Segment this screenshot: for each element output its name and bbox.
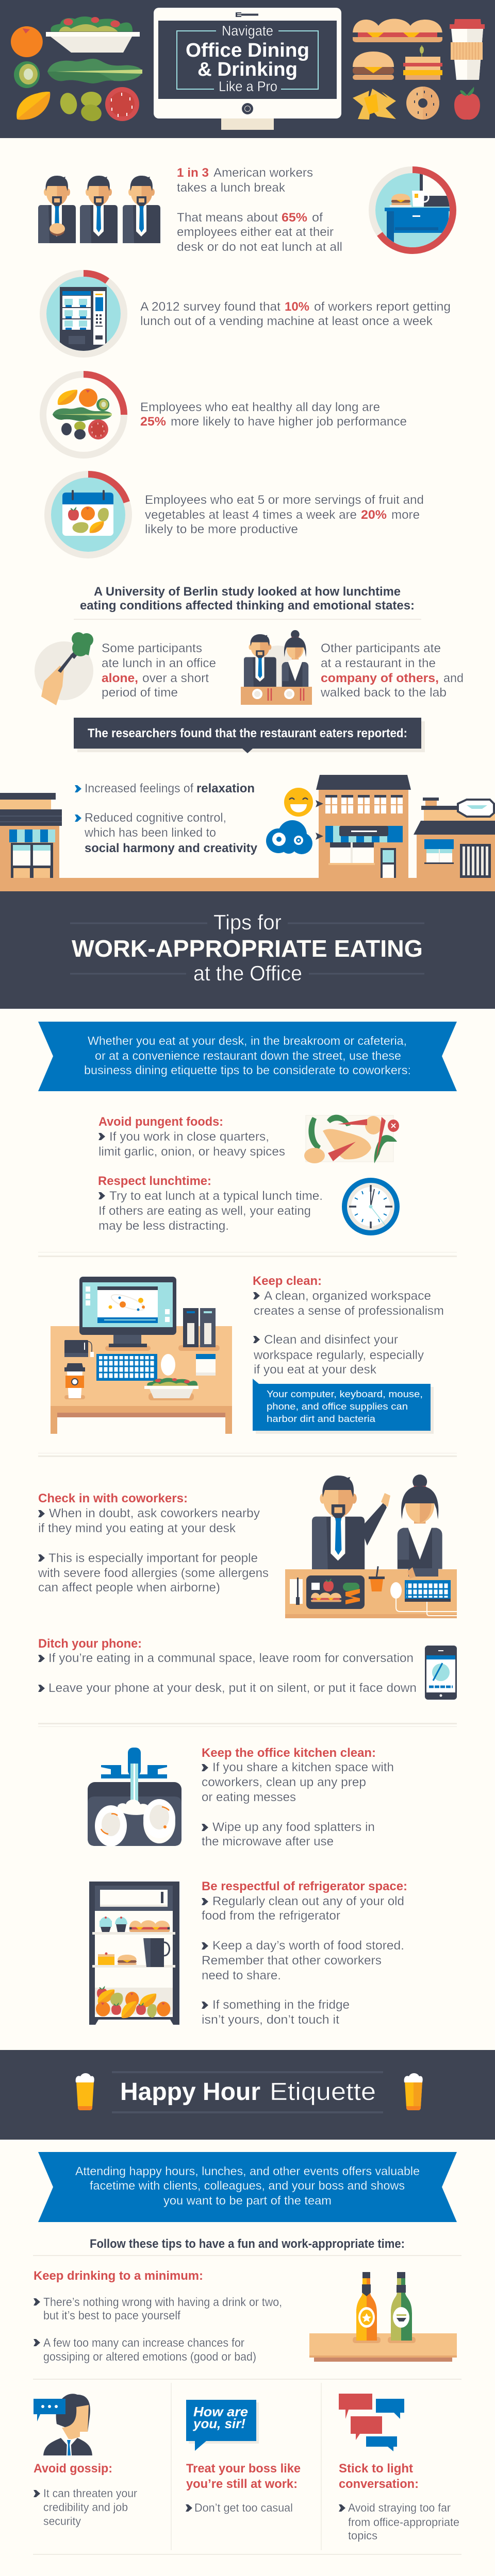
stat: 25 percent job performance — [43, 374, 407, 455]
icon: beer right — [404, 2073, 423, 2110]
icon: chat bubbles — [339, 2394, 404, 2451]
text block: American workers — [213, 166, 313, 180]
bullet: cognitive control: which has been linked to — [84, 826, 216, 840]
tip: keep drinking to a minimum: but it’s best to pace yourself — [43, 2309, 181, 2322]
chart: 25 percent ring with healthy plate — [43, 374, 124, 455]
text block: period of time — [102, 686, 178, 700]
napkin and fork — [290, 1578, 303, 1605]
tip: respect refrigerator space: isn’t yours, don’t touch it — [202, 2013, 339, 2027]
illustration: tidy desk — [51, 1277, 232, 1434]
tip: avoid gossip: Avoid gossip: — [34, 2462, 112, 2476]
tip: keep kitchen clean: Keep the office kitchen clean: — [202, 1746, 376, 1760]
text block — [140, 300, 451, 328]
chart: 10 percent ring with vending machine — [43, 273, 126, 355]
tip: check in with coworkers — [38, 1492, 269, 1595]
text block: A 2012 survey found that — [140, 300, 280, 314]
tip: keep clean: workspace regularly, especially — [253, 1348, 424, 1362]
banner: dining etiquette intro: business dining etiquette tips to be considerate to coworkers: — [84, 1063, 411, 1077]
text block — [140, 400, 407, 429]
tip: respect refrigerator space: Regularly clean out any of your old — [212, 1894, 404, 1908]
callout: researchers found — [74, 718, 425, 753]
text block: alone, — [102, 671, 138, 685]
banner: happy hour intro: you want to be part of the team — [163, 2194, 332, 2207]
notepad — [196, 1354, 216, 1376]
tip: stick to light conversation: conversation: — [339, 2477, 419, 2491]
icon: how are you speech bubble: How are — [193, 2404, 248, 2419]
icon: clock — [344, 1180, 397, 1233]
street ground — [0, 878, 495, 891]
tip: stick to light conversation — [339, 2394, 459, 2542]
tip: treat your boss: Treat your boss like — [186, 2462, 301, 2476]
tip: check in with coworkers: if they mind you eating at your desk — [38, 1521, 236, 1535]
tip: avoid gossip: It can threaten your — [43, 2487, 137, 2500]
text block: likely to be more productive — [145, 522, 298, 536]
tip: respect lunchtime — [98, 1174, 397, 1233]
tip: respect lunchtime: If others are eating as well, your eating — [98, 1204, 311, 1218]
text block: ate lunch in an office — [102, 656, 216, 670]
bullet: relaxation: relaxation — [196, 782, 255, 795]
section header: happy hour etiquette — [0, 2050, 495, 2140]
tip: stick to light conversation: Stick to light — [339, 2462, 413, 2476]
title: Navigate — [222, 23, 273, 39]
text block: and — [443, 671, 464, 685]
tip: check in with coworkers: with severe food allergies (some allergens — [38, 1566, 269, 1580]
tip: respect refrigerator space: need to share. — [202, 1969, 281, 1982]
section header: tips for work-appropriate eating: Tips for — [213, 910, 282, 934]
icon: bottles on bar — [309, 2272, 457, 2362]
speakers — [178, 1308, 220, 1351]
callout: computer bacteria: phone, and office supplies can — [267, 1401, 408, 1412]
icon: how are you speech bubble: you, sir! — [192, 2416, 245, 2431]
icon: desktop monitor — [154, 8, 341, 130]
text block — [145, 493, 424, 536]
illustration: restaurant street — [0, 775, 495, 891]
icon: hand with fork and broccoli — [35, 632, 93, 705]
title: Office Dining — [186, 40, 309, 61]
text block — [177, 166, 342, 254]
icon: right building — [414, 798, 495, 878]
tip: keep kitchen clean: or eating messes — [202, 1790, 296, 1804]
icon: man with speech bubble — [34, 2394, 92, 2455]
text block — [320, 641, 464, 700]
lunch tray — [306, 1575, 365, 1609]
chart: 65 percent ring with desk — [371, 170, 454, 252]
text block: of workers report getting — [314, 300, 451, 314]
icon: how are you speech bubble — [186, 2400, 259, 2451]
tip: keep clean: if you eat at your desk — [254, 1363, 377, 1377]
tip: keep clean: Keep clean: — [253, 1274, 322, 1288]
heading: University of Berlin study — [80, 585, 415, 613]
stat: 10 percent vending machine — [43, 273, 451, 355]
panel: eating alone — [35, 632, 216, 705]
callout: computer bacteria: Your computer, keyboard, mouse, — [267, 1388, 423, 1399]
tip: avoid pungent foods: If you work in close quarters, — [109, 1130, 269, 1144]
tip: respect refrigerator space: If something in the fridge — [212, 1998, 350, 2012]
tip: keep kitchen clean: coworkers, clean up any prep — [202, 1775, 366, 1789]
text block: That means about — [177, 211, 278, 225]
tip: check in with coworkers: Check in with coworkers: — [38, 1492, 188, 1505]
keyboard — [96, 1354, 157, 1381]
tip: avoid pungent foods: Avoid pungent foods: — [98, 1115, 223, 1129]
text block: lunch out of a vending machine at least once a week — [140, 314, 433, 328]
text block: more — [391, 508, 420, 522]
text block — [102, 641, 216, 700]
tip: respect lunchtime: Respect lunchtime: — [98, 1174, 211, 1188]
salad bowl — [144, 1378, 199, 1400]
icon: smiling face — [284, 788, 323, 817]
mouse — [161, 1354, 175, 1376]
text block: 1 in 3 — [177, 166, 209, 180]
banner: happy hour intro — [38, 2152, 457, 2222]
icon: refrigerator — [89, 1882, 179, 2025]
tip: treat your boss — [186, 2400, 301, 2514]
tip: keep drinking to a minimum: There’s nothing wrong with having a drink or two, — [43, 2295, 282, 2309]
text block: Employees who eat 5 or more servings of fruit and — [145, 493, 424, 507]
callout: computer bacteria: harbor dirt and bacteria — [267, 1413, 376, 1424]
icon: left building — [0, 793, 62, 882]
tip: avoid gossip: security — [43, 2515, 81, 2528]
banner: happy hour intro: Attending happy hours, lunches, and other events offers valuable — [75, 2164, 420, 2178]
text block: Some participants — [102, 641, 202, 655]
tip: avoid gossip — [34, 2394, 137, 2528]
icon: three workers — [38, 176, 160, 243]
banner: dining etiquette intro: Whether you eat at your desk, in the breakroom or cafeteria, — [88, 1034, 407, 1047]
section header: happy hour etiquette: Happy Hour — [120, 2078, 260, 2106]
icon: brain gears — [266, 820, 323, 854]
stat: 20 percent productivity — [47, 474, 424, 555]
tip: check in with coworkers: When in doubt, ask coworkers nearby — [49, 1506, 260, 1520]
bullet: relaxation: Increased feelings of — [85, 782, 193, 795]
bullet: cognitive control: Reduced cognitive control, — [85, 811, 226, 825]
tip: stick to light conversation: Avoid straying too far — [348, 2501, 451, 2514]
stat: 1 in 3 lunch break — [38, 166, 454, 254]
title: Like a Pro — [219, 78, 277, 94]
tip: respect refrigerator space: Keep a day’s worth of food stored. — [212, 1939, 404, 1953]
tip: keep clean: A clean, organized workspace — [264, 1289, 431, 1303]
banner: happy hour intro: facetime with clients, colleagues, and your boss and shows — [90, 2179, 405, 2192]
banner: dining etiquette intro — [38, 1022, 457, 1091]
hard drive — [64, 1340, 94, 1357]
tip: treat your boss: you’re still at work: — [186, 2477, 298, 2491]
icon: phone with no symbol — [425, 1646, 457, 1700]
heading: University of Berlin study: eating conditions affected thinking and emotional states: — [80, 599, 415, 613]
text block: 25% — [140, 415, 166, 429]
tip: stick to light conversation: from office-appropriate — [348, 2516, 459, 2529]
bullet: cognitive control: social harmony and creativity — [85, 841, 258, 855]
text block: Employees who eat healthy all day long are — [140, 400, 380, 414]
icon: two coworkers at table — [241, 630, 312, 705]
text block: walked back to the lab — [320, 686, 447, 700]
bullet: cognitive control — [75, 811, 258, 855]
title — [186, 23, 309, 94]
chart: 20 percent ring with calendar — [47, 474, 129, 555]
text block: at a restaurant in the — [321, 656, 436, 670]
tip: keep drinking to a minimum: A few too many can increase chances for — [43, 2336, 244, 2349]
tip: ditch your phone: Ditch your phone: — [38, 1637, 142, 1651]
heading: University of Berlin study: A University of Berlin study looked at how lunchtime — [94, 585, 401, 599]
tip: avoid gossip: credibility and job — [43, 2501, 128, 2514]
illustration: coworkers at shared desk — [285, 1475, 457, 1618]
tip: avoid pungent foods — [98, 1115, 399, 1163]
tip: keep clean: Clean and disinfect your — [264, 1333, 398, 1347]
banner: dining etiquette intro: or at a convenience restaurant down the street, use these — [95, 1049, 401, 1062]
tip: respect refrigerator space: Remember that other coworkers — [202, 1954, 382, 1968]
tip: keep kitchen clean — [202, 1746, 394, 1849]
drink cup — [369, 1566, 385, 1591]
coffee cup — [64, 1363, 85, 1399]
section header: happy hour etiquette: Etiquette — [270, 2078, 376, 2106]
tip: keep kitchen clean: If you share a kitchen space with — [212, 1760, 394, 1774]
tip: keep drinking to a minimum — [34, 2269, 457, 2363]
tip: avoid pungent foods: limit garlic, onion, or heavy spices — [98, 1145, 285, 1159]
tip: ditch your phone: If you’re eating in a communal space, leave room for conversation — [48, 1651, 414, 1665]
text block: over a short — [142, 671, 209, 685]
mouse and keyboard — [390, 1580, 457, 1616]
text block: more likely to have higher job performance — [171, 415, 407, 429]
tip: keep clean — [253, 1274, 444, 1434]
icon: beer left — [76, 2073, 94, 2110]
tip: respect lunchtime: may be less distracting. — [98, 1219, 229, 1233]
tip: keep clean: creates a sense of professionalism — [254, 1304, 444, 1318]
tip: keep drinking to a minimum: Keep drinking to a minimum: — [34, 2269, 203, 2283]
section header: tips for work-appropriate eating: WORK-APPROPRIATE EATING — [72, 935, 423, 962]
icon: main restaurant — [316, 775, 411, 878]
text block: 65% — [282, 211, 307, 225]
header panel — [0, 0, 495, 138]
tip: ditch your phone — [38, 1637, 457, 1700]
heading: follow these tips: Follow these tips to have a fun and work-appropriate time: — [90, 2237, 405, 2251]
tip: ditch your phone: Leave your phone at your desk, put it on silent, or put it face down — [48, 1681, 417, 1695]
title frame — [177, 31, 318, 89]
text block: desk or do not eat lunch at all — [177, 240, 342, 254]
tip: respect refrigerator space — [202, 1879, 407, 2027]
section header: tips for work-appropriate eating: at the Office — [193, 961, 302, 985]
title: & Drinking — [197, 59, 298, 80]
tip: stick to light conversation: topics — [348, 2529, 377, 2542]
text block: of — [312, 211, 323, 225]
icon: left food group — [11, 16, 142, 123]
callout: computer bacteria — [253, 1379, 434, 1434]
section header: tips for work-appropriate eating — [0, 891, 495, 1009]
text block: company of others, — [321, 671, 439, 685]
tip: respect lunchtime: Try to eat lunch at a typical lunch time. — [109, 1189, 323, 1203]
callout: researchers found: The researchers found that the restaurant eaters reported: — [88, 726, 407, 740]
icon: right food group — [353, 19, 485, 120]
text block: 10% — [285, 300, 309, 314]
text block: employees either eat at their — [177, 225, 334, 239]
text block: Other participants ate — [321, 641, 441, 655]
icon: pungent foods — [304, 1115, 399, 1163]
tip: keep drinking to a minimum: gossiping or altered emotions (good or bad) — [43, 2350, 256, 2363]
tip: check in with coworkers: This is especially important for people — [48, 1551, 258, 1565]
text block: vegetables at least 4 times a week are — [145, 508, 357, 522]
bullet: relaxation — [75, 782, 255, 795]
monitor — [79, 1277, 176, 1351]
tip: keep kitchen clean: the microwave after use — [202, 1835, 334, 1849]
tip: keep kitchen clean: Wipe up any food splatters in — [212, 1820, 375, 1834]
tip: respect refrigerator space: food from the refrigerator — [202, 1909, 340, 1923]
icon: sink with dishes — [88, 1748, 182, 1846]
text block: takes a lunch break — [177, 181, 286, 195]
tip: treat your boss: Don’t get too casual — [194, 2501, 293, 2514]
text block: 20% — [361, 508, 387, 522]
tip: check in with coworkers: can affect people when airborne) — [38, 1581, 220, 1595]
panel: eating with others — [241, 630, 464, 705]
tip: respect refrigerator space: Be respectful of refrigerator space: — [202, 1879, 407, 1893]
